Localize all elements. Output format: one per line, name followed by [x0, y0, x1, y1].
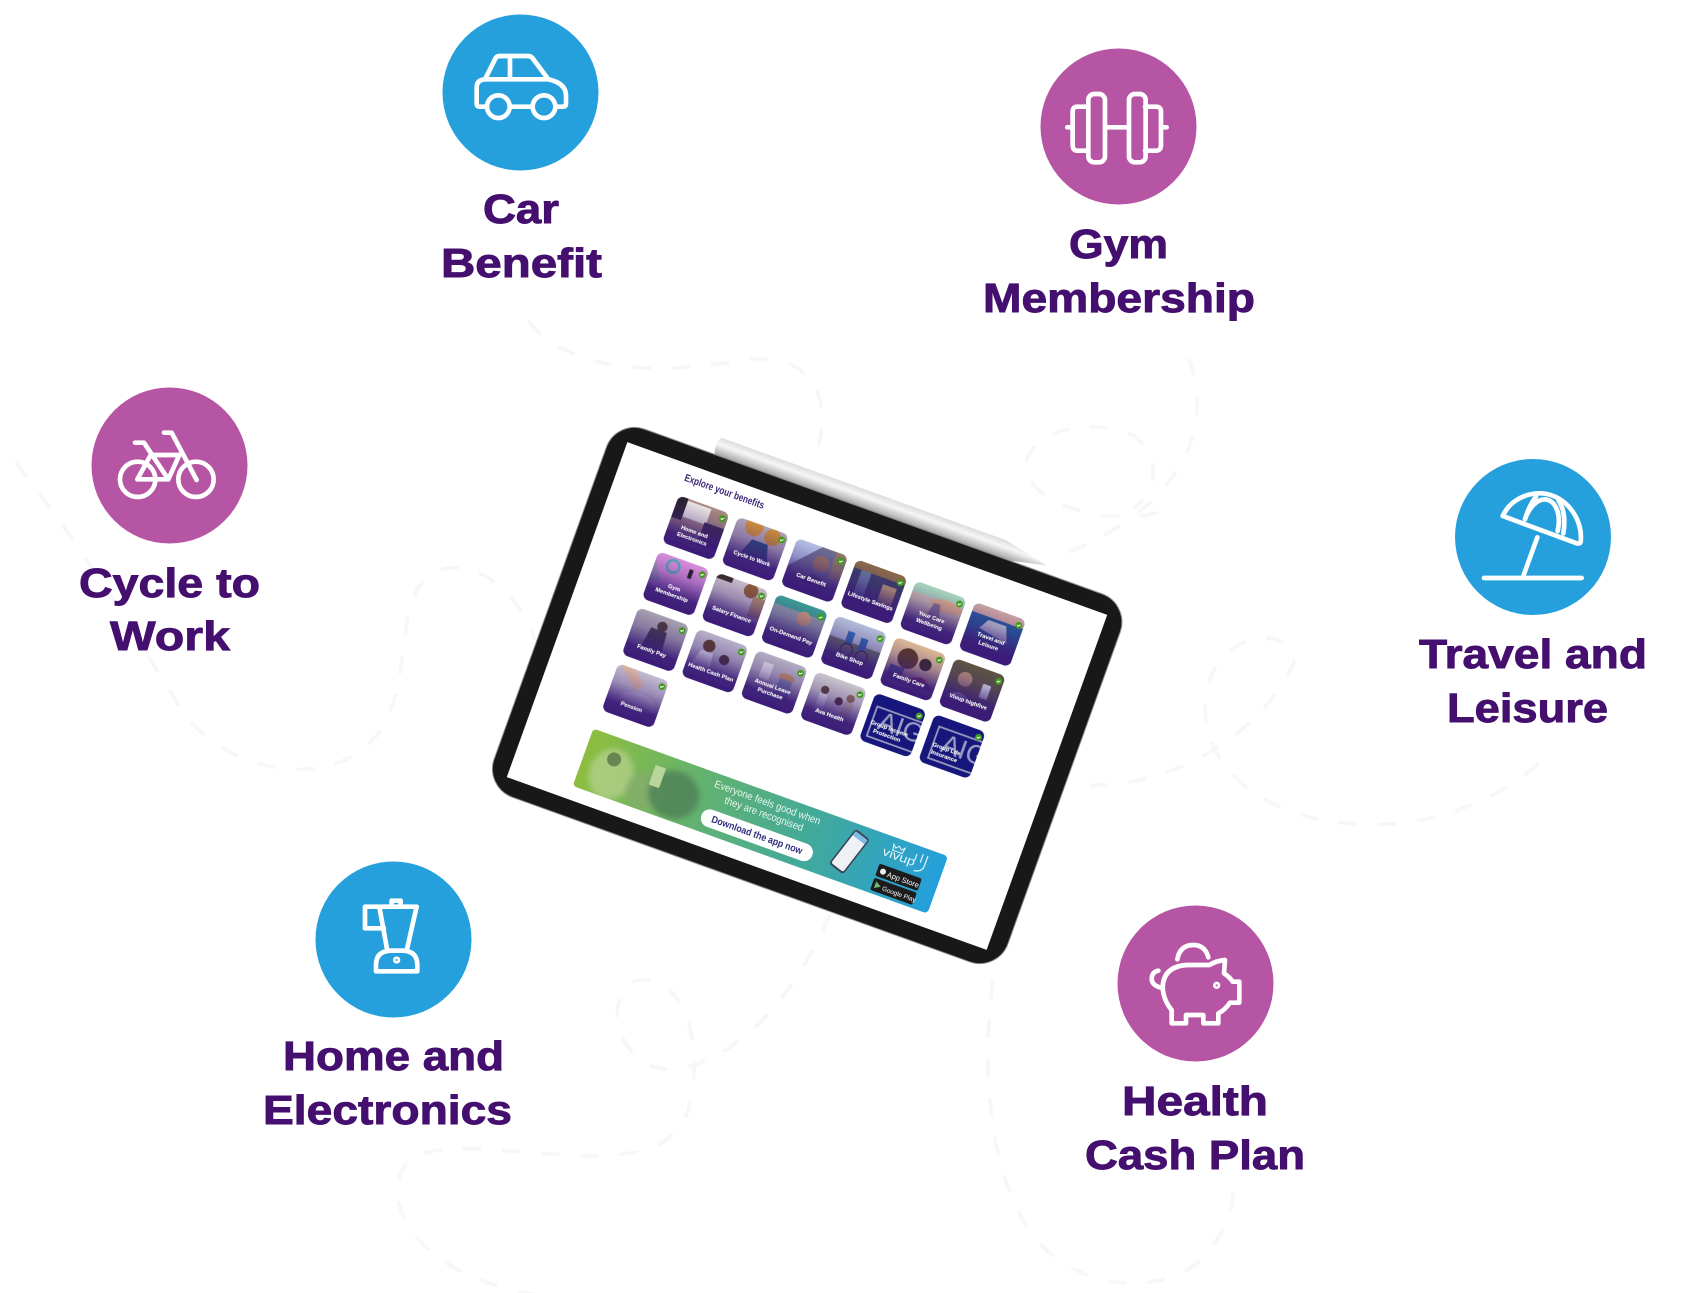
banner photo	[586, 746, 702, 821]
benefit: car benefit	[441, 14, 602, 286]
tile: travel and leisure	[958, 602, 1026, 667]
icon: piggy bank	[1118, 906, 1274, 1062]
label: home and electronics: Home and	[283, 1033, 504, 1079]
stylus pencil	[712, 437, 1050, 575]
tile: group income protection: Group Income	[869, 720, 909, 739]
icon: bicycle	[92, 388, 248, 544]
benefit tile grid	[602, 496, 1025, 778]
tile: group life insurance	[919, 715, 984, 778]
icon: blender	[316, 862, 472, 1018]
label: health cash plan: Cash Plan	[1085, 1132, 1305, 1178]
tile: car benefit	[781, 538, 848, 603]
tile: family pay	[622, 607, 689, 673]
tile: cycle to work	[722, 518, 788, 580]
banner headline: Everyone feels good when	[713, 778, 822, 828]
tile: salary finance	[702, 574, 768, 636]
google play badge	[870, 878, 919, 906]
tile: on-demand pay: On-Demand Pay	[769, 626, 814, 647]
tile: vivup highfive: Vivup highfive	[948, 693, 988, 712]
tile: pension	[602, 663, 669, 729]
label: travel and leisure: Travel and	[1419, 631, 1647, 677]
google play badge: Google Play	[881, 886, 917, 904]
tile: lifestyle savings	[840, 559, 908, 625]
label: car benefit: Benefit	[441, 240, 602, 286]
tile: cycle to work: Cycle to Work	[732, 550, 772, 569]
tablet body	[484, 419, 1130, 972]
tile: ava health: Ava Health	[814, 708, 845, 724]
phone mockup	[829, 829, 870, 874]
tile: health cash plan	[681, 629, 749, 694]
app store badge	[875, 863, 922, 891]
label: travel and leisure: Leisure	[1447, 685, 1608, 731]
banner headline: they are recognised	[723, 795, 805, 834]
tile: car benefit: Car Benefit	[795, 572, 827, 589]
tile: health cash plan: Health Cash Plan	[687, 662, 734, 684]
tile: home and electronics: Home and	[680, 525, 709, 541]
vivup logo: vivup	[881, 844, 918, 869]
benefit: cycle to work	[79, 388, 260, 659]
vivup logo	[880, 842, 928, 873]
benefit: health cash plan	[1085, 906, 1305, 1178]
label: car benefit: Car	[483, 186, 559, 232]
screen heading: Explore your benefits	[683, 472, 766, 512]
label: gym membership: Gym	[1069, 221, 1168, 267]
tile: your care wellbeing	[899, 581, 967, 646]
tile: home and electronics: Electronics	[676, 532, 707, 548]
tile: annual leave purchase: Purchase	[757, 687, 784, 702]
tile: home and electronics	[662, 495, 730, 561]
tile: annual leave purchase: Annual Leave	[754, 678, 792, 697]
tile: your care wellbeing: Wellbeing	[915, 618, 943, 633]
tile: family pay: Family Pay	[636, 644, 667, 660]
label: health cash plan: Health	[1122, 1078, 1268, 1124]
app download banner	[572, 729, 948, 916]
tile: your care wellbeing: Your Care	[917, 611, 946, 626]
tile: group life insurance: Group Life	[931, 742, 962, 758]
tile: bike shop: Bike Shop	[835, 652, 864, 667]
tablet	[484, 402, 1136, 972]
download button: Download the app now	[710, 814, 804, 857]
tablet screen	[507, 442, 1107, 950]
label: home and electronics: Electronics	[263, 1087, 512, 1133]
tile: on-demand pay	[760, 594, 828, 659]
icon: beach umbrella	[1455, 459, 1611, 615]
tile: group income protection	[860, 694, 926, 756]
tile: gym membership: Membership	[654, 587, 689, 604]
benefit: travel and leisure	[1419, 459, 1647, 731]
tile: travel and leisure: Travel and	[976, 632, 1005, 647]
tile: family care	[879, 637, 947, 702]
tile: group income protection: Protection	[872, 729, 901, 744]
tile: group life insurance: AIG	[937, 728, 991, 772]
tile: lifestyle savings: Lifestyle Savings	[847, 591, 894, 613]
app store badge: App Store	[886, 870, 920, 890]
icon: dumbbell	[1040, 48, 1196, 204]
tile: group life insurance: Insurance	[930, 749, 958, 765]
tile: vivup highfive	[938, 658, 1006, 723]
tile: gym membership: Gym	[667, 584, 681, 594]
tile: bike shop	[820, 615, 887, 681]
label: cycle to work: Cycle to	[79, 560, 260, 606]
label: gym membership: Membership	[983, 275, 1255, 321]
tile: ava health	[799, 671, 867, 737]
tile: pension: Pension	[620, 701, 643, 714]
icon: car	[442, 14, 598, 170]
benefit: gym membership	[983, 48, 1255, 321]
benefit: home and electronics	[263, 862, 512, 1133]
tile: group income protection: AIG	[874, 706, 928, 750]
tile: family care: Family Care	[892, 673, 926, 690]
tile: salary finance: Salary Finance	[711, 605, 752, 625]
label: cycle to work: Work	[110, 613, 230, 659]
tile: gym membership	[642, 551, 710, 617]
tile: travel and leisure: Leisure	[977, 640, 999, 653]
tile: annual leave purchase	[740, 650, 808, 715]
